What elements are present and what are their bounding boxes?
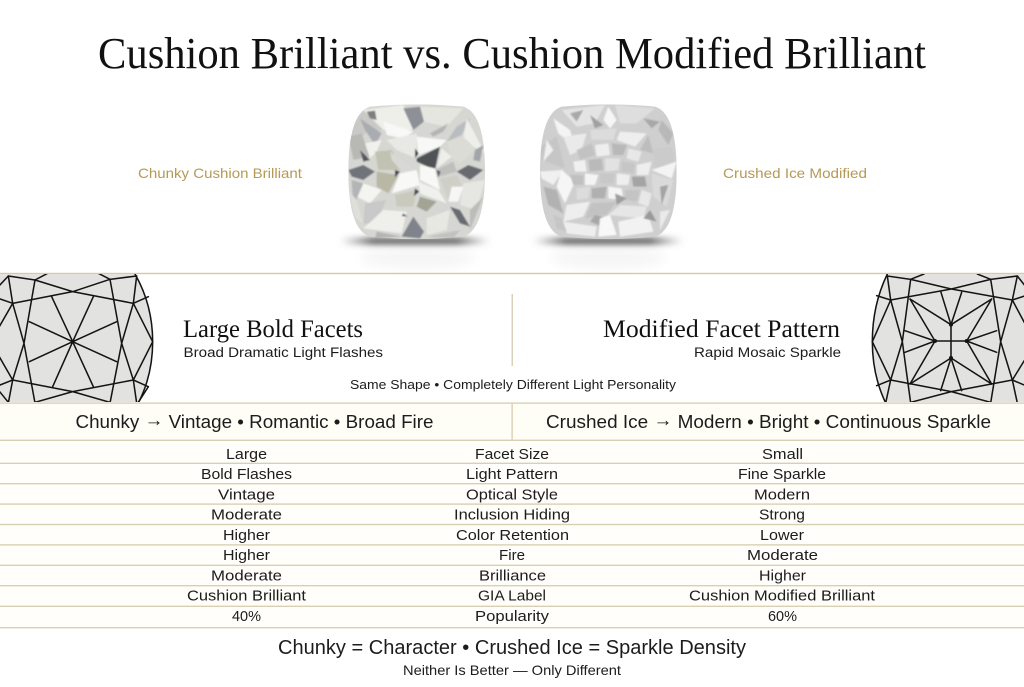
row: fire: Fire — [499, 547, 525, 564]
row: inclusion hiding — [211, 506, 805, 524]
summary line: Chunky = Character • Crushed Ice = Sparkle Density — [278, 637, 746, 659]
comparison ribbon: Chunky — [76, 411, 138, 432]
row: brilliance: Higher — [759, 568, 806, 584]
centre divider — [512, 294, 513, 366]
label: chunky cushion brilliant: Chunky Cushion Brilliant — [138, 165, 302, 181]
row: popularity: Popularity — [475, 608, 550, 625]
row: color retention: Lower — [760, 527, 804, 544]
comparison ribbon: Modern • Bright • Continuous Sparkle — [672, 411, 991, 432]
row: color retention: Color Retention — [456, 527, 569, 544]
row: brilliance: Moderate — [211, 568, 282, 584]
subheading: broad dramatic light flashes: Broad Dramatic Light Flashes — [184, 345, 383, 360]
row: GIA label: Cushion Brilliant — [187, 588, 307, 604]
row: light pattern: Bold Flashes — [201, 466, 292, 483]
row: brilliance — [211, 568, 806, 584]
comparison ribbon: Crushed Ice — [546, 411, 646, 432]
comparison ribbon: → — [145, 409, 163, 430]
row: popularity: 60% — [768, 608, 797, 625]
row: optical style: Optical Style — [466, 486, 558, 504]
row: optical style: Modern — [754, 486, 810, 504]
row: fire: Moderate — [747, 547, 818, 564]
comparison ribbon: → — [653, 409, 672, 430]
row: facet size: Small — [762, 446, 803, 463]
row: popularity — [232, 608, 797, 625]
row: GIA label: Cushion Modified Brilliant — [689, 588, 876, 604]
row: facet size: Large — [226, 446, 267, 463]
heading: large bold facets: Large Bold Facets — [183, 316, 363, 343]
comparison table — [0, 441, 1024, 628]
row: fire: Higher — [223, 547, 270, 564]
row: color retention — [223, 527, 804, 544]
shadow and reflection: left diamond — [340, 238, 490, 269]
row: light pattern: Light Pattern — [466, 466, 558, 483]
tagline: Same Shape • Completely Different Light Personality — [350, 377, 677, 392]
comparison ribbon — [0, 402, 1024, 441]
row: optical style: Vintage — [218, 486, 275, 504]
row: color retention: Higher — [223, 527, 270, 544]
row: facet size — [226, 446, 803, 463]
closing note: Neither Is Better — Only Different — [403, 662, 621, 678]
subheading: rapid mosaic sparkle: Rapid Mosaic Sparkle — [694, 345, 841, 360]
label: crushed ice modified: Crushed Ice Modified — [723, 165, 867, 181]
row: GIA label: GIA Label — [478, 588, 546, 604]
row: inclusion hiding: Inclusion Hiding — [454, 506, 570, 524]
row: inclusion hiding: Moderate — [211, 506, 282, 524]
row: light pattern: Fine Sparkle — [738, 466, 826, 483]
rule: top of facet band — [0, 273, 1024, 274]
row: fire — [223, 547, 818, 564]
row: popularity: 40% — [232, 608, 261, 625]
diagram: modified facet pattern wireframe — [872, 274, 1024, 403]
row: optical style — [218, 486, 810, 504]
shadow and reflection: right diamond — [533, 238, 683, 269]
row: GIA label — [187, 588, 876, 604]
icon: chunky cushion diamond photo — [348, 104, 485, 240]
diagram: large bold facets wireframe — [0, 273, 153, 403]
heading: modified facet pattern: Modified Facet Pattern — [603, 316, 841, 343]
row: inclusion hiding: Strong — [759, 506, 805, 524]
icon: crushed ice cushion diamond photo — [540, 104, 676, 240]
row: brilliance: Brilliance — [479, 568, 546, 584]
row: facet size: Facet Size — [475, 446, 549, 463]
title: Cushion Brilliant vs. Cushion Modified Brilliant — [98, 29, 926, 78]
row: light pattern — [201, 466, 826, 483]
comparison ribbon: Vintage • Romantic • Broad Fire — [163, 411, 434, 432]
